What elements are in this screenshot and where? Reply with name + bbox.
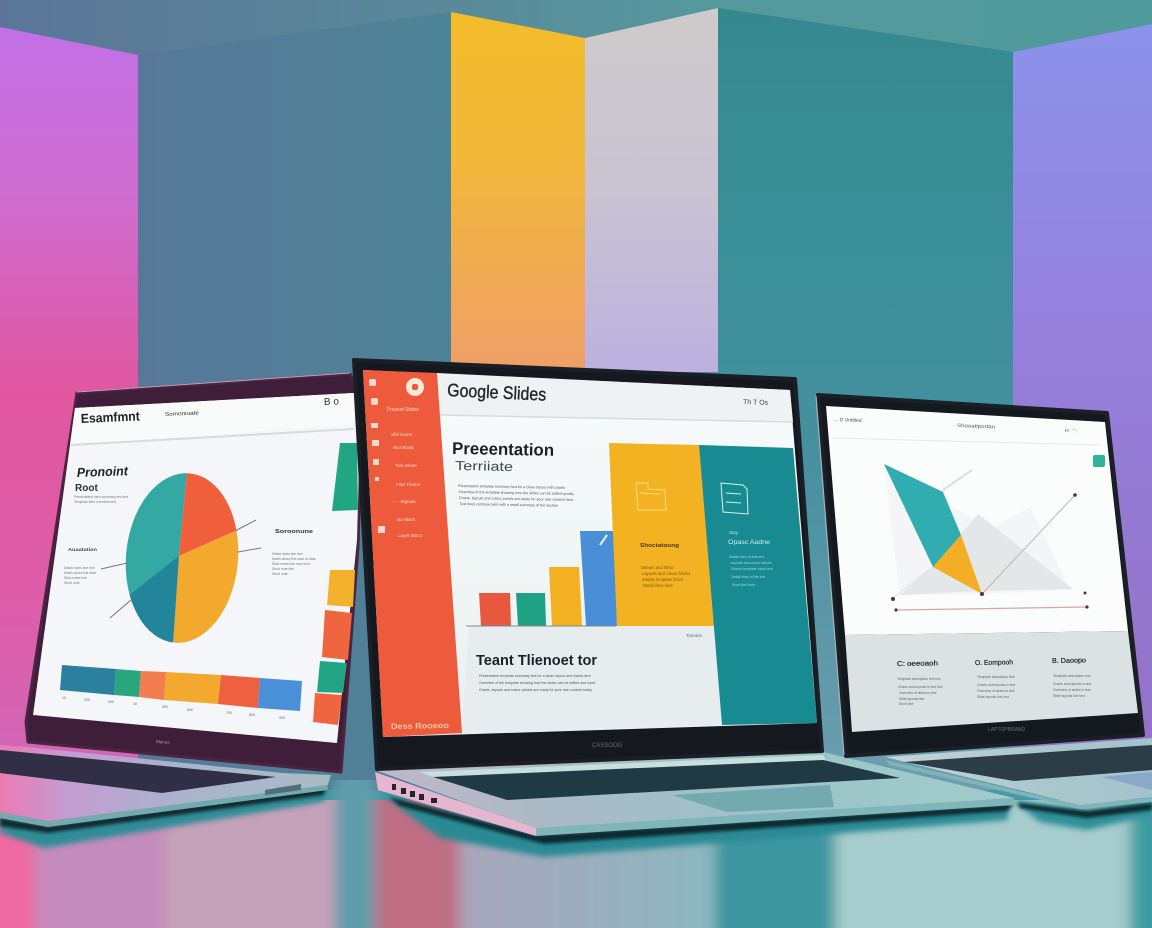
wall panel: pink bbox=[0, 27, 138, 790]
brand label: LAPTOPBRAND bbox=[988, 727, 1026, 733]
guide line left bbox=[893, 567, 933, 598]
keyboard keys bbox=[0, 750, 276, 793]
teal panel body: Layouts and colour blocks bbox=[730, 561, 772, 565]
bar: green bbox=[516, 593, 546, 626]
lower body: Charts, layouts and colour panels are ready for your own content today bbox=[479, 688, 592, 692]
pie slice: dark teal bbox=[130, 556, 179, 642]
laptop: right bbox=[816, 395, 1152, 818]
sidebar footer: Dess Rooeoo bbox=[391, 721, 449, 731]
lower body: Presentation template summary text for a clean layout and charts here bbox=[479, 674, 591, 678]
guide line top bbox=[943, 470, 972, 490]
point markers bbox=[891, 493, 1089, 612]
back wall slate bbox=[138, 12, 451, 800]
yellow panel heading: Shoctatoung bbox=[640, 543, 679, 549]
bar: red bbox=[479, 593, 511, 626]
deck front edge bbox=[0, 785, 328, 827]
yellow panel body: Layouts and colour blocks bbox=[642, 571, 690, 576]
body paragraph: Presentation template summary text for a clean layout with charts bbox=[458, 484, 565, 490]
wall panel: teal bbox=[718, 8, 1013, 800]
slide title: Preeentation bbox=[452, 439, 554, 460]
bar chart bbox=[466, 531, 617, 626]
block: red bbox=[322, 610, 352, 660]
teal reflection: left laptop bbox=[0, 790, 330, 848]
teal reflection: right laptop bbox=[1012, 800, 1152, 830]
caption: Tonoton bbox=[686, 633, 703, 638]
menu item 3: Tool Share bbox=[395, 463, 417, 468]
wall panel: violet bbox=[1013, 24, 1152, 800]
strip tick labels: 700 bbox=[226, 711, 232, 715]
grey mountain bbox=[900, 514, 1073, 595]
left annotation body: Slice notes line bbox=[64, 576, 87, 580]
left annotation body: Detail notes line text bbox=[64, 566, 95, 570]
brand label: CASSOOG bbox=[592, 743, 623, 749]
column body 1: Overview of slides in text bbox=[899, 691, 937, 695]
column body 2: Template description text bbox=[977, 675, 1015, 679]
block: red lower bbox=[313, 693, 342, 725]
stacked bar strip bbox=[60, 665, 302, 711]
sidebar logo glyph bbox=[412, 384, 418, 390]
base line bbox=[896, 607, 1087, 610]
right annotation body: Detail notes line text bbox=[272, 552, 303, 556]
column body 1: Slide layouts line bbox=[899, 697, 925, 701]
right annotation body: Slice notes line more text bbox=[272, 562, 310, 566]
teal panel label: Stay bbox=[729, 530, 739, 535]
deck front edge bbox=[885, 760, 1152, 809]
screen bbox=[33, 393, 360, 743]
menu item 5: - - - Signale bbox=[392, 499, 416, 504]
toolbar title: Esamfmnt bbox=[80, 408, 141, 426]
yellow panel body: Detail lines here bbox=[643, 583, 674, 588]
lower section bbox=[462, 626, 722, 733]
screen base bbox=[363, 370, 817, 737]
teal facet bbox=[884, 464, 961, 567]
deck front edge bbox=[536, 798, 1014, 836]
strip tick labels: 500 bbox=[162, 705, 168, 709]
right annotation body: Short note bbox=[272, 572, 288, 576]
strip: yellow bbox=[164, 672, 221, 704]
toolbar bbox=[437, 373, 793, 422]
right annotation body: Short note line bbox=[272, 567, 294, 571]
teal reflection: centre laptop bbox=[382, 795, 1010, 857]
wall panel: yellow bbox=[451, 12, 585, 372]
contact shadow bbox=[1018, 803, 1152, 818]
screen bezel bbox=[26, 374, 362, 772]
teal panel body: Simple template block text bbox=[731, 567, 773, 571]
block: green lower bbox=[317, 661, 347, 693]
column body 2: Slide layouts line text bbox=[977, 695, 1009, 699]
bar pen mark bbox=[600, 535, 607, 545]
strip tick labels: 40 bbox=[133, 702, 137, 706]
yellow panel body: Stream and show bbox=[641, 565, 675, 570]
yellow panel folder icon bbox=[636, 483, 666, 510]
body paragraph: Overview of the template showing how the slides can be edited quickly bbox=[459, 490, 574, 496]
strip tick labels: 10 bbox=[62, 696, 66, 700]
toolbar left text: ... D Untitled bbox=[834, 417, 862, 424]
strip: green bbox=[114, 669, 141, 697]
keyboard deck bbox=[0, 745, 331, 821]
contact shadow bbox=[389, 797, 1014, 844]
laptop: left bbox=[0, 373, 362, 833]
menu item 6: Bo Block bbox=[397, 517, 416, 522]
deck left side edge bbox=[375, 772, 536, 836]
toolbar centre text: Shooatiportan bbox=[957, 423, 995, 430]
strip: red bbox=[218, 675, 260, 708]
side blocks bbox=[313, 443, 358, 725]
bar: yellow bbox=[549, 567, 582, 626]
screen bezel bbox=[354, 360, 822, 769]
floor base bbox=[0, 790, 1152, 928]
keyboard deck bbox=[885, 738, 1152, 805]
menu item 7: Layer Bloco bbox=[398, 533, 423, 538]
guide line diagonal bbox=[982, 495, 1075, 594]
panel: yellow bbox=[609, 443, 714, 626]
sidebar logo circle bbox=[406, 378, 424, 396]
slide title: Pronoint bbox=[77, 463, 129, 480]
yellow panel body: Simple template block bbox=[642, 577, 684, 582]
brand label: Manco bbox=[156, 739, 170, 745]
column heading 2: O. Eompooh bbox=[975, 659, 1013, 667]
slide subtitle: Root bbox=[75, 483, 98, 494]
yellow facet bbox=[933, 535, 982, 594]
bar: blue bbox=[580, 531, 617, 626]
baseline bbox=[466, 625, 616, 627]
teal panel heading: Opasc Aadne bbox=[728, 539, 770, 546]
column body 1: Short line bbox=[899, 702, 913, 706]
sidebar icons bbox=[369, 379, 385, 533]
left annotation: Auaatation bbox=[68, 547, 97, 552]
toolbar divider bbox=[71, 429, 354, 445]
screen bezel bbox=[818, 395, 1143, 756]
sidebar heading: Prasent Stidne bbox=[387, 407, 419, 413]
wall panel: slate centre bbox=[451, 372, 851, 802]
left annotation body: Short note bbox=[64, 581, 80, 585]
panel: teal bbox=[699, 445, 817, 725]
strip: orange bbox=[139, 671, 166, 700]
pie slice: teal bbox=[126, 473, 187, 605]
toolbar subtitle: Somoniuate bbox=[165, 411, 199, 418]
column heading 3: B. Daoopo bbox=[1052, 657, 1086, 665]
slide intro text: Template intro overview text bbox=[74, 500, 116, 504]
column body 1: Template description text line bbox=[897, 677, 941, 681]
teal panel body: Detail lines of the text bbox=[731, 575, 765, 579]
column heading 1: C: oeeoaoh bbox=[897, 660, 938, 668]
teal panel body: Short line here bbox=[732, 583, 755, 587]
sidebar menu bbox=[391, 432, 423, 538]
teal panel document icon bbox=[721, 483, 748, 514]
wall panel: lilac bbox=[585, 8, 718, 376]
strip: blue bbox=[258, 678, 302, 711]
strip tick labels: 600 bbox=[187, 708, 193, 712]
block: yellow bbox=[327, 570, 355, 607]
toolbar icons: Th T Os bbox=[743, 399, 769, 407]
column body 3: Template description text bbox=[1053, 674, 1091, 678]
pie chart bbox=[126, 473, 238, 643]
contact shadow bbox=[0, 787, 327, 833]
block: green bbox=[332, 443, 358, 511]
pie slice: yellow bbox=[173, 530, 238, 643]
sidebar: red bbox=[363, 370, 462, 737]
light mountain bbox=[884, 464, 1070, 595]
strip tick labels: 200 bbox=[84, 698, 90, 702]
pie leader lines bbox=[101, 520, 261, 618]
column body 3: Slide layouts line text bbox=[1053, 694, 1085, 698]
strip tick labels: 800 bbox=[249, 713, 255, 717]
screen bbox=[826, 406, 1128, 635]
body paragraph: Charts, layouts and colour panels are ready for your own content here bbox=[459, 496, 573, 502]
column body 2: Overview of slides in text bbox=[977, 689, 1015, 693]
ports bbox=[392, 784, 437, 803]
bezel highlight bbox=[77, 373, 350, 392]
keyboard pale hinge band bbox=[420, 755, 826, 777]
toolbar bbox=[70, 393, 354, 445]
menu item 2: Blot Blank bbox=[393, 445, 414, 450]
menu item 1: Slid Home bbox=[391, 432, 413, 437]
left annotation body: Notes about this slice bbox=[64, 571, 96, 575]
keyboard keys bbox=[433, 760, 900, 800]
column body 3: Charts and layouts in text bbox=[1053, 682, 1091, 686]
strip tick labels: 900 bbox=[279, 716, 285, 720]
column body 1: Charts and layouts in text line bbox=[898, 685, 943, 689]
menu item 4: Fold Theme bbox=[396, 482, 421, 487]
trackpad bbox=[1102, 772, 1152, 790]
floor with vertical colour reflections bbox=[0, 780, 1152, 928]
strip tick labels: 300 bbox=[108, 700, 114, 704]
silver edge bbox=[816, 396, 844, 755]
ceiling band bbox=[0, 0, 1152, 55]
teal panel body: Detail lines of teal text bbox=[729, 555, 764, 559]
column body 3: Overview of slides in text bbox=[1053, 688, 1091, 692]
right annotation body: Notes about this slice of data bbox=[272, 557, 316, 561]
side ports bbox=[265, 784, 301, 795]
toolbar right icons: H : " : bbox=[1065, 428, 1077, 434]
lower body: Overview of the template showing how the slides can be edited and used bbox=[479, 681, 595, 685]
body paragraph: Text lines continue here with a small summary of the section bbox=[460, 502, 558, 508]
right annotation: Soroonune bbox=[275, 529, 313, 535]
reflection bands bbox=[0, 780, 1152, 928]
lower section bbox=[845, 631, 1138, 732]
trackpad bbox=[672, 785, 834, 812]
slide subtitle: Terriiate bbox=[455, 458, 513, 474]
green tag bbox=[1093, 455, 1105, 467]
lower heading: Teant Tlienoet tor bbox=[476, 653, 597, 669]
app title: Google Slides bbox=[447, 380, 547, 405]
toolbar divider bbox=[440, 415, 793, 422]
laptop: centre, Google Slides bbox=[354, 360, 1014, 844]
column body 2: Charts and layouts in text bbox=[977, 683, 1015, 687]
toolbar divider bbox=[832, 438, 1100, 445]
pie slice: red bbox=[179, 473, 236, 556]
geometric chart bbox=[884, 464, 1089, 612]
toolbar icons text: B o bbox=[324, 396, 340, 408]
strip: blue teal bbox=[60, 665, 116, 695]
slide intro text: Presentation intro summary text line bbox=[74, 495, 128, 499]
keyboard keys bbox=[904, 745, 1152, 781]
keyboard deck bbox=[375, 752, 1014, 828]
